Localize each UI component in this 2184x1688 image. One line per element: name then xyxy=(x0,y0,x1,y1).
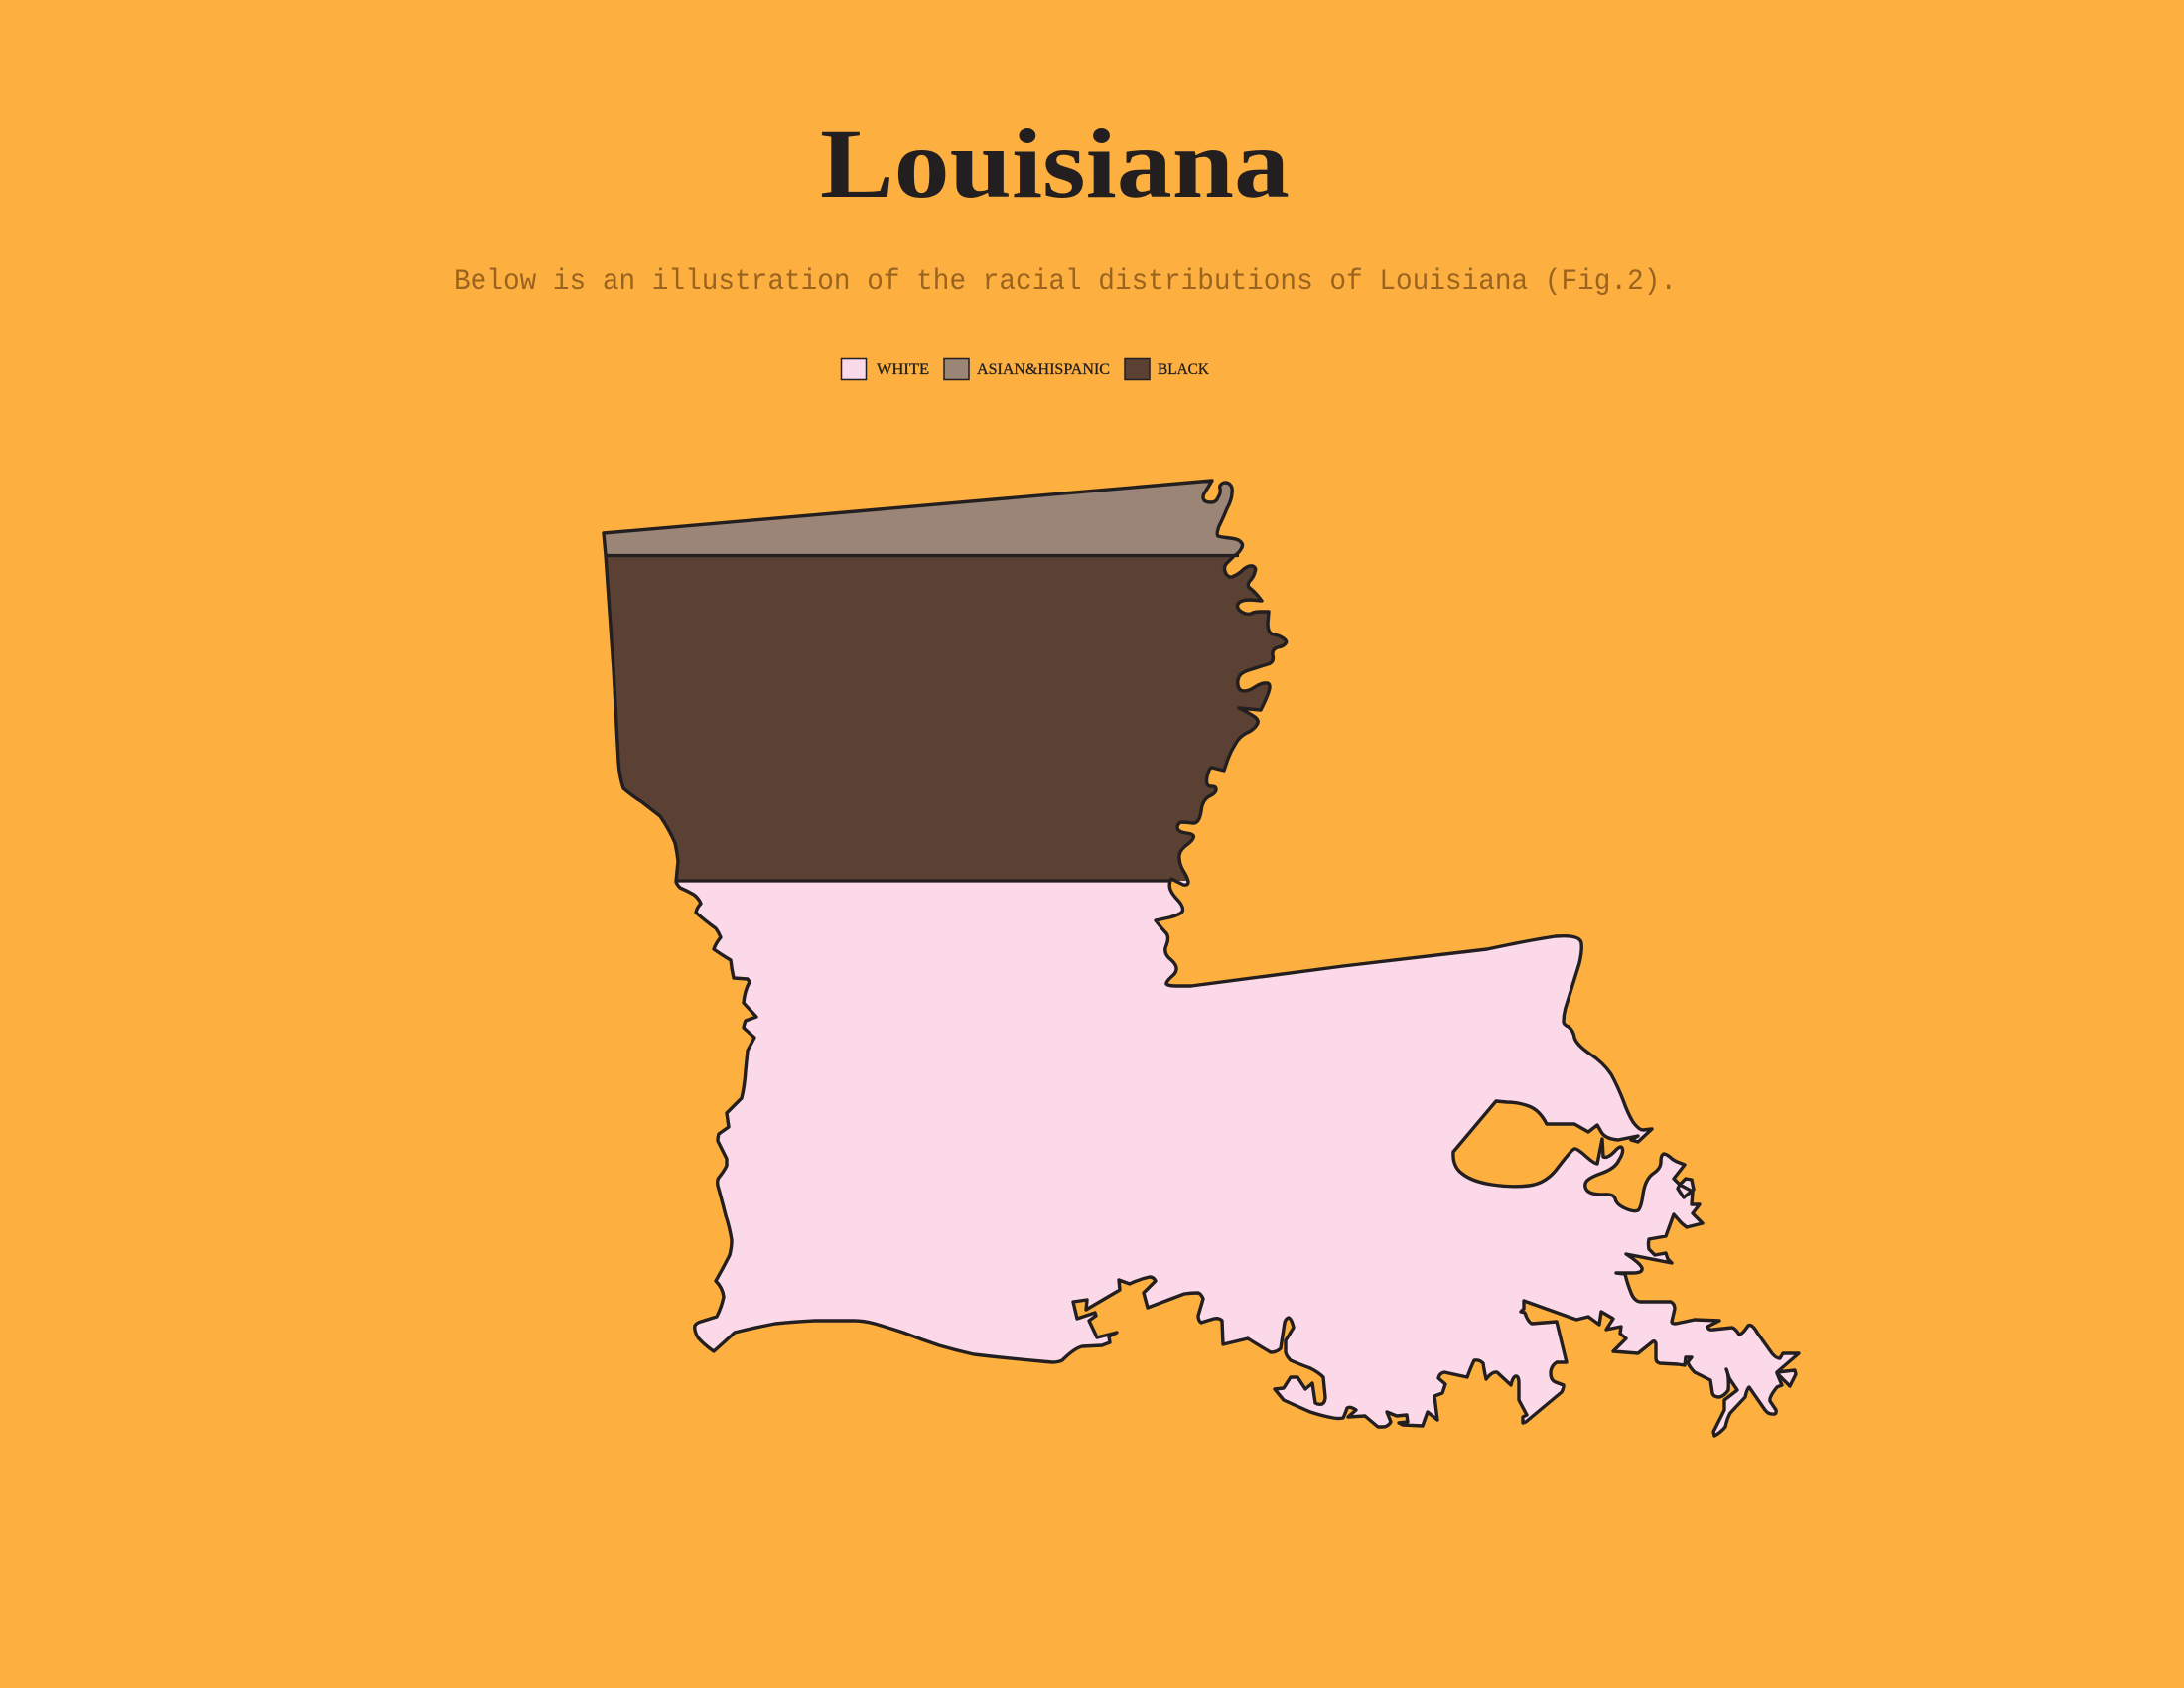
divider: asian and hispanic / black xyxy=(606,554,1239,557)
divider: black / white xyxy=(676,879,1171,883)
region: black share xyxy=(586,556,1300,882)
state outline xyxy=(604,481,1799,1436)
title: Louisiana xyxy=(820,108,1290,218)
legend label: white: WHITE xyxy=(877,361,929,378)
legend label: asian and hispanic: ASIAN&HISPANIC xyxy=(977,361,1110,378)
region: asian and hispanic share xyxy=(604,483,1241,554)
subtitle text: Below is an illustration of the racial distributions of Louisiana (Fig.2). xyxy=(454,265,1677,299)
legend swatch: white xyxy=(842,359,866,379)
region: white share xyxy=(655,881,1827,1457)
legend swatch: black xyxy=(1125,359,1150,379)
map of Louisiana xyxy=(586,467,1827,1457)
legend xyxy=(842,359,1210,379)
legend swatch: asian and hispanic xyxy=(944,359,969,379)
legend label: black: BLACK xyxy=(1158,361,1210,378)
